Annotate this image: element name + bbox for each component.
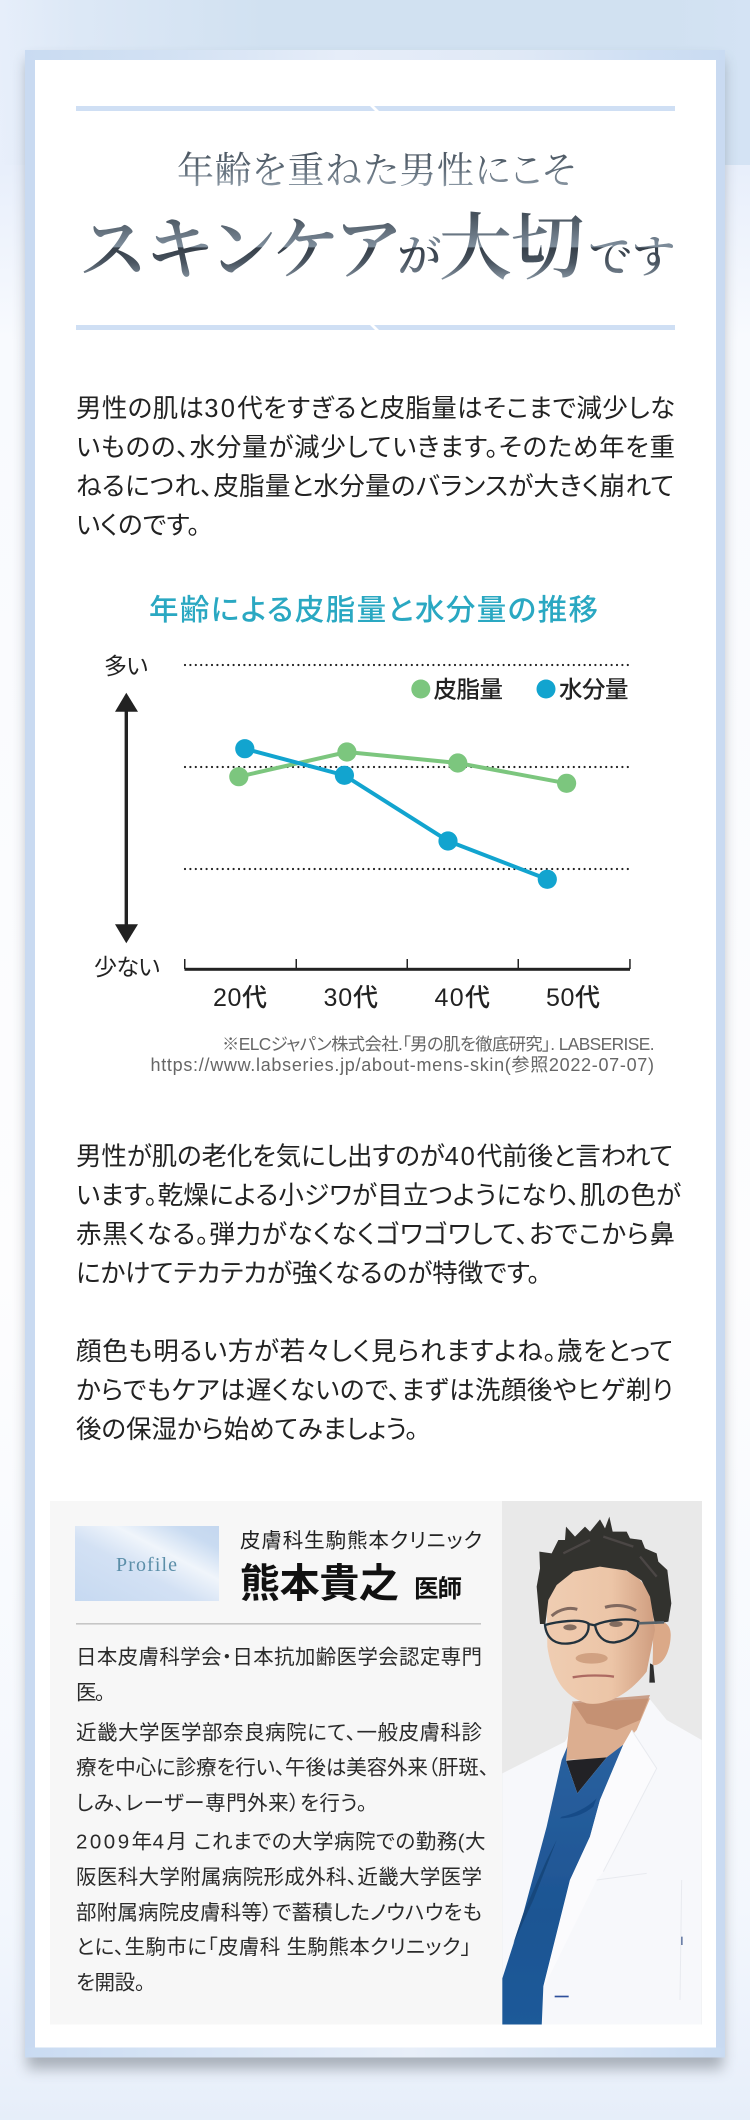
series: water xyxy=(235,739,557,889)
profile text: history xyxy=(76,1830,486,1994)
text block: care advice xyxy=(76,1338,673,1444)
doctor coat and scrubs xyxy=(502,1695,702,2027)
legend: sebum: 皮脂量 xyxy=(434,676,503,702)
profile text: career: 近畿大学医学部奈良病院にて、一般皮膚科診 xyxy=(76,1722,482,1744)
profile text: certification: 日本皮膚科学会・日本抗加齢医学会認定専門 xyxy=(76,1646,482,1669)
heading line 2: です xyxy=(589,233,674,282)
profile text: certification: 医。 xyxy=(76,1682,105,1704)
series: sebum xyxy=(229,742,576,793)
heading line 2: が xyxy=(396,232,440,281)
profile divider xyxy=(76,1623,481,1625)
text block: intro: 男性の肌は30代をすぎると皮脂量はそこまで減少しな xyxy=(76,395,675,423)
top heading rule xyxy=(76,106,675,111)
source note xyxy=(150,1034,654,1075)
source note: ※ELCジャパン株式会社.「男の肌を徹底研究」. LABSERISE. xyxy=(222,1034,654,1054)
legend: water: 水分量 xyxy=(559,676,628,702)
profile text: history: 部附属病院皮膚科等）で蓄積したノウハウをも xyxy=(76,1902,482,1924)
x axis labels xyxy=(213,984,600,1012)
badge: Profile: Profile xyxy=(116,1554,177,1576)
arrow: vertical double-headed xyxy=(115,693,138,943)
heading line 2: 大切 xyxy=(439,208,584,289)
profile text: history: 阪医科大学附属病院形成外科、近畿大学医学 xyxy=(76,1866,482,1889)
text block: skin aging in forties xyxy=(76,1143,681,1288)
bottom heading rule xyxy=(76,325,675,330)
text block: skin aging in forties: 男性が肌の老化を気にし出すのが40代前後と言われて xyxy=(76,1143,673,1171)
clinic name: 皮膚科生駒熊本クリニック xyxy=(240,1530,482,1552)
source note: https://www.labseries.jp/about-mens-skin(参照2022-07-07) xyxy=(150,1055,654,1075)
doctor head xyxy=(537,1517,671,1704)
y axis label: few: 少ない xyxy=(94,954,160,980)
text block: care advice: 後の保湿から始めてみましょう。 xyxy=(76,1416,418,1444)
x axis labels: 20代 xyxy=(213,984,267,1012)
text block: skin aging in forties: にかけてテカテカが強くなるのが特徴です。 xyxy=(76,1260,540,1288)
text block: skin aging in forties: います。乾燥による小ジワが目立つようになり、肌の色が xyxy=(76,1182,681,1210)
doctor name: 熊本貴之 xyxy=(240,1562,399,1606)
text block: care advice: 顔色も明るい方が若々しく見られますよね。歳をとって xyxy=(76,1338,673,1366)
x axis labels: 50代 xyxy=(546,984,600,1012)
panel: doctor profile xyxy=(50,1501,702,2027)
profile text: career xyxy=(76,1722,489,1815)
text block: intro: いくのです。 xyxy=(76,512,200,540)
profile background xyxy=(50,1501,702,2024)
y axis label: many: 多い xyxy=(104,653,148,679)
text block: intro xyxy=(76,395,675,540)
text block: skin aging in forties: 赤黒くなる。弾力がなくなくゴワゴワして、おでこから鼻 xyxy=(76,1221,675,1249)
text block: intro: いものの、水分量が減少していきます。そのため年を重 xyxy=(76,434,675,462)
heading line 1: 年齢を重ねた男性にこそ xyxy=(177,150,576,192)
x axis labels: 30代 xyxy=(324,984,378,1012)
x axis labels: 40代 xyxy=(434,984,490,1012)
profile text: career: しみ、レーザー専門外来）を行う。 xyxy=(76,1792,367,1815)
photo: doctor portrait xyxy=(502,1501,702,2027)
profile text: career: 療を中心に診療を行い、午後は美容外来（肝斑、 xyxy=(76,1756,489,1780)
badge: Profile xyxy=(75,1526,219,1601)
doctor title: 医師 xyxy=(414,1575,462,1603)
profile text: certification xyxy=(76,1646,482,1704)
heading line 2 xyxy=(80,208,674,289)
profile text: history: とに、生駒市に「皮膚科 生駒熊本クリニック」 xyxy=(76,1936,471,1959)
profile text: history: 2009年4月 これまでの大学病院での勤務(大 xyxy=(76,1830,486,1854)
profile text: history: を開設。 xyxy=(76,1972,145,1994)
grid dotted lines xyxy=(185,665,629,869)
heading block xyxy=(76,106,675,330)
text block: care advice: からでもケアは遅くないので、まずは洗顔後やヒゲ剃り xyxy=(76,1377,673,1405)
x axis xyxy=(184,959,631,971)
chart: age trend of sebum and water xyxy=(94,594,654,1075)
text block: intro: ねるにつれ、皮脂量と水分量のバランスが大きく崩れて xyxy=(76,473,674,501)
heading line 2: スキンケア xyxy=(80,212,398,288)
chart title: 年齢による皮脂量と水分量の推移 xyxy=(149,594,598,627)
